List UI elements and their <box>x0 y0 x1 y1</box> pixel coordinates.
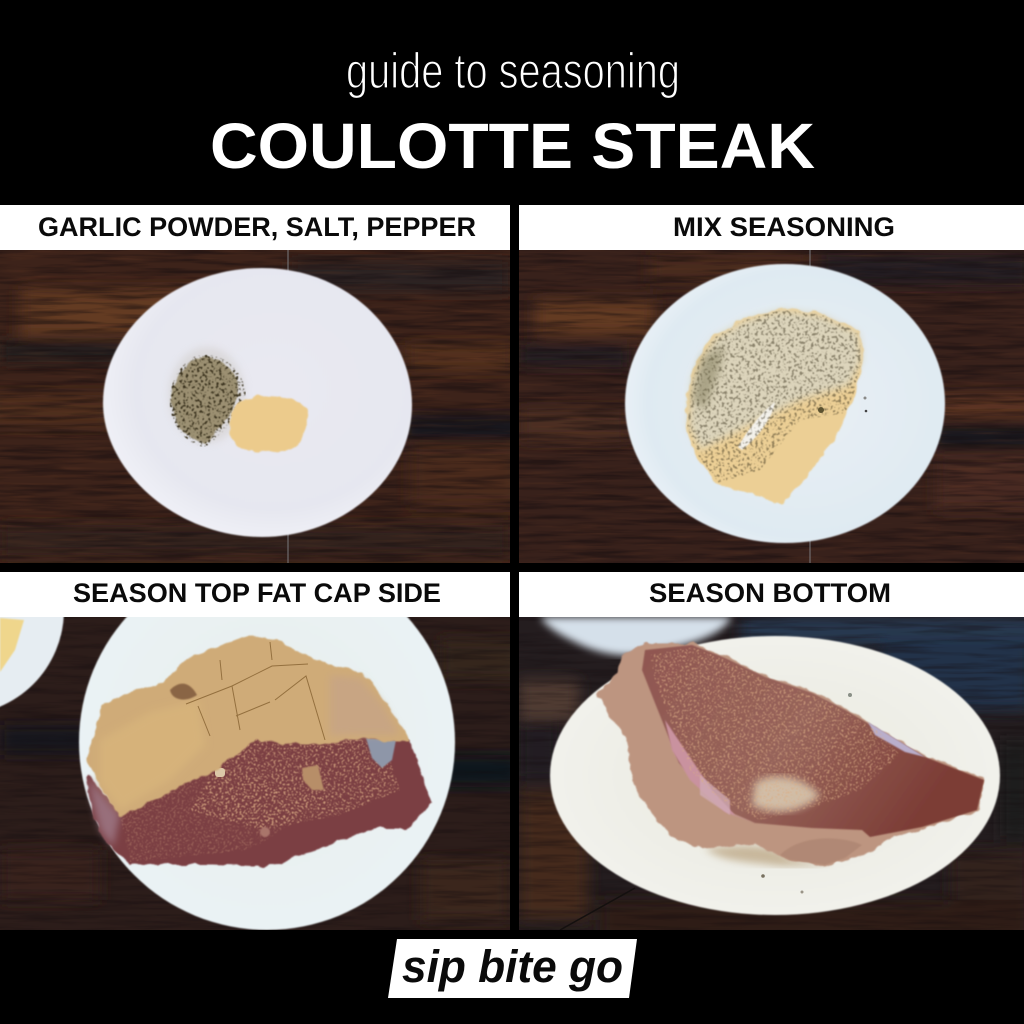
title <box>210 43 815 182</box>
panel: season top fat cap side <box>0 572 510 930</box>
photo: steak fat cap side <box>0 617 510 930</box>
heading <box>519 572 1024 617</box>
steak <box>600 645 984 865</box>
photo: steak bottom side <box>519 617 1024 940</box>
panel: mix seasoning <box>519 205 1024 563</box>
plate <box>625 264 945 543</box>
photo: mixed seasoning on plate <box>519 250 1024 563</box>
side plate with seasoning <box>0 617 65 708</box>
fat cap <box>88 637 408 815</box>
pepper and salt pile <box>169 347 246 447</box>
heading: MIX SEASONING <box>673 212 895 242</box>
background bowl <box>540 617 732 655</box>
plate <box>78 617 456 930</box>
heading: SEASON BOTTOM <box>649 578 891 608</box>
heading <box>0 205 510 250</box>
heading <box>0 572 510 617</box>
seasoning mix <box>687 310 867 502</box>
garlic powder pile <box>229 395 307 452</box>
panel: garlic powder, salt, pepper <box>0 205 525 563</box>
heading: SEASON TOP FAT CAP SIDE <box>73 578 441 608</box>
subtitle: guide to seasoning: guide to seasoning <box>346 43 680 99</box>
photo: spices on plate <box>0 250 525 563</box>
plate juices <box>705 845 830 866</box>
meat <box>88 737 430 865</box>
panel: season bottom <box>519 572 1024 940</box>
plate <box>103 268 412 537</box>
main title: coulotte steak: COULOTTE STEAK <box>210 110 815 182</box>
logo: sip bite go: sip bite go <box>402 941 623 992</box>
heading: GARLIC POWDER, SALT, PEPPER <box>38 212 476 242</box>
heading <box>519 205 1024 250</box>
plate <box>550 636 1000 915</box>
